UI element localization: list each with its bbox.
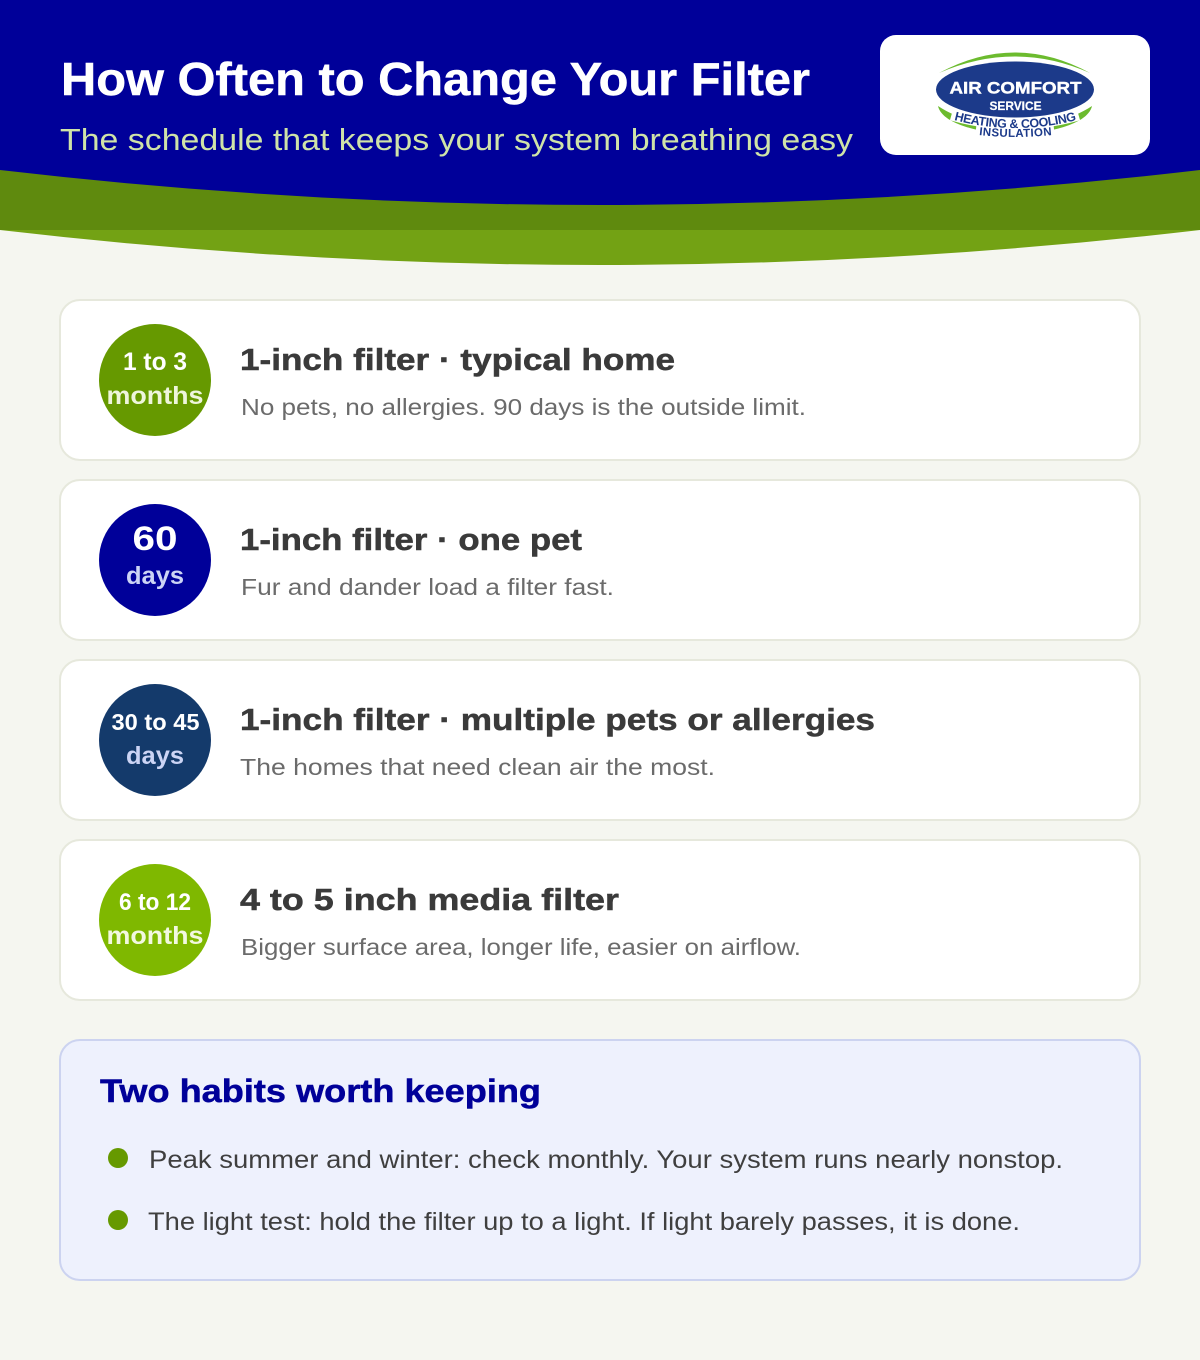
subtitle: The schedule that keeps your system breathing easy [60,122,854,157]
card: 1-inch typical home [60,300,1140,460]
badge: 6 to 12 months: months [106,922,204,950]
badge: 30 to 45 days: 30 to 45 [112,709,200,735]
badge: 60 days: days [126,562,184,590]
card description: Bigger surface area, longer life, easier on airflow. [241,934,801,960]
card description: No pets, no allergies. 90 days is the outside limit. [241,394,806,420]
card: 1-inch one pet [60,480,1140,640]
badge: 6 to 12 months [99,864,211,976]
card: 4 to 5 inch media filter [60,840,1140,1000]
badge: 1 to 3 months [99,324,211,436]
logo: Air Comfort Service: SERVICE [990,101,1042,113]
title: How Often to Change Your Filter [61,53,810,105]
logo: Air Comfort Service: HEATING & COOLING [954,112,1076,128]
card heading: 1-inch filter · multiple pets or allergies [240,702,875,737]
panel heading: Two habits worth keeping [100,1073,541,1109]
badge: 30 to 45 days [99,684,211,796]
badge: 60 days [99,504,211,616]
card heading: 4 to 5 inch media filter [240,882,619,917]
logo: Air Comfort Service [880,35,1150,155]
badge: 1 to 3 months: 1 to 3 [123,348,187,376]
badge: 30 to 45 days: days [126,742,184,770]
header banner with curved green band [0,0,1200,265]
badge: 6 to 12 months: 6 to 12 [119,889,191,916]
card description: The homes that need clean air the most. [240,754,715,780]
badge: 60 days: 60 [132,520,178,558]
logo: Air Comfort Service: AIR COMFORT [950,80,1082,98]
card heading: 1-inch filter · one pet [240,522,582,557]
panel: two habits worth keeping [60,1040,1140,1280]
bullet: the light test: The light test: hold the filter up to a light. If light barely passes, it is done. [148,1208,1020,1236]
card description: Fur and dander load a filter fast. [241,574,614,600]
card heading: 1-inch filter · typical home [240,342,675,377]
card: 1-inch multiple pets or allergies [60,660,1140,820]
badge: 1 to 3 months: months [106,382,204,410]
bullet: peak summer and winter: Peak summer and winter: check monthly. Your system runs nearly nonstop. [149,1146,1063,1174]
logo: Air Comfort Service: INSULATION [980,127,1052,137]
